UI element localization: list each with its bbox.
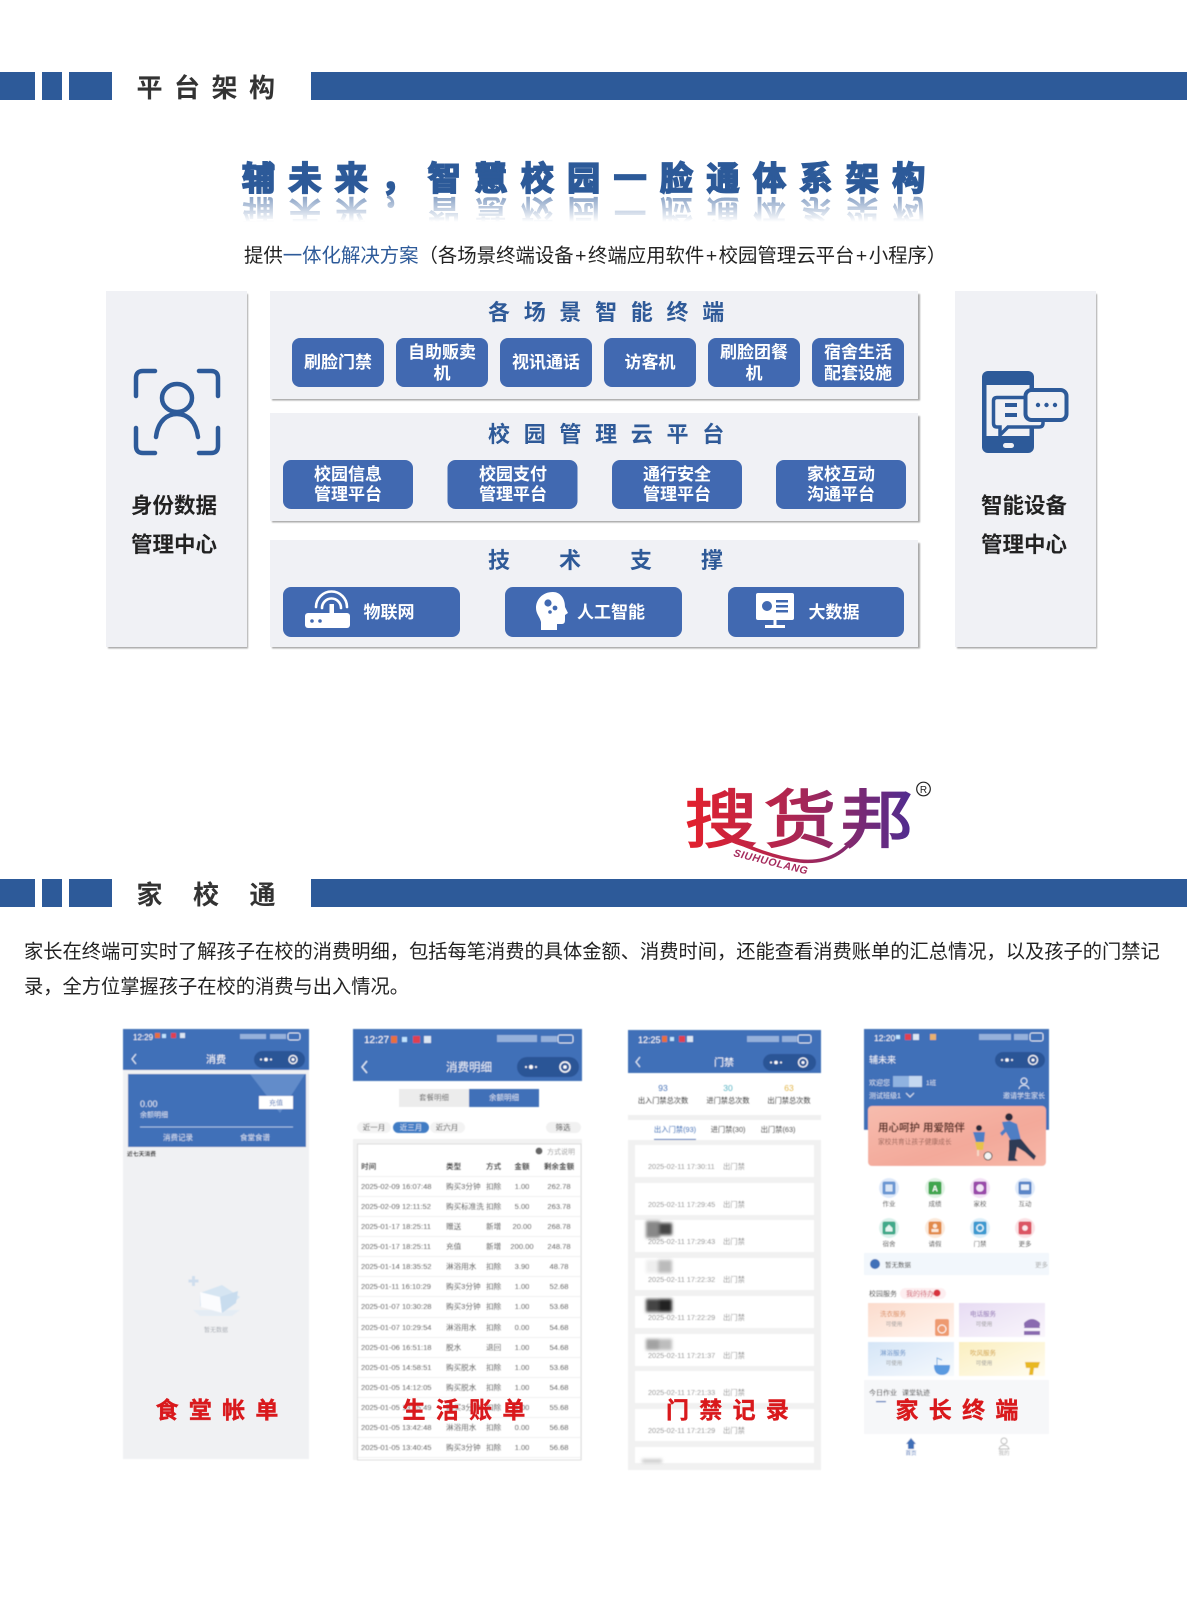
empty-state box illustration [188, 1276, 240, 1316]
phone screenshot: parent terminal: 电话服务 [970, 1309, 996, 1318]
phone screenshot: living bill: 淋浴用水 [446, 1261, 477, 1271]
platform buttons [283, 460, 906, 509]
phone screenshot: living bill: 金额 [514, 1161, 530, 1171]
phone screenshot: access records: 进门禁总次数 [706, 1096, 750, 1105]
phone screenshot: living bill: 淋浴用水 [446, 1322, 477, 1332]
phone screenshot: living bill: 购买脱水 [446, 1362, 477, 1372]
phone screenshot: living bill: 扣除 [486, 1402, 502, 1412]
phone screenshot: parent terminal: 校园服务 [869, 1289, 897, 1298]
tech button: big data [728, 587, 904, 637]
phone screenshot: parent terminal: 课堂轨迹 [902, 1388, 930, 1397]
phone screenshot: living bill: 0.00 [515, 1423, 529, 1432]
feature icons: 作业 [882, 1199, 896, 1208]
phone screenshot: access records: 93 [658, 1083, 668, 1093]
subtitle: 提供一体化解决方案（各场景终端设备+终端应用软件+校园管理云平台+小程序） [244, 245, 946, 267]
section header: 平台架构: 平台架构 [136, 73, 287, 103]
phone screenshot: living bill: 2025-02-09 16:07:48 [361, 1182, 432, 1191]
phone screenshot: living bill: 53.68 [549, 1363, 569, 1372]
phone screenshot: living bill: 余额明细 [489, 1092, 519, 1102]
phone screenshot: parent terminal: 吹风服务 [970, 1348, 996, 1357]
phone screenshot: living bill: 1.00 [515, 1302, 529, 1311]
banner: 用心呵护 用爱陪伴 [878, 1121, 965, 1134]
phone screenshot: parent terminal: 可使用 [886, 1359, 902, 1367]
phone screenshot: access records: 2025-02-11 17:21:37 [648, 1351, 715, 1360]
feature icons: A [932, 1184, 938, 1194]
panel: smart terminals: 各场景智能终端 [488, 300, 738, 325]
phone screenshot: living bill: 20.00 [512, 1222, 532, 1231]
phone screenshot: living bill: 扣除 [486, 1281, 502, 1291]
phone screenshot: access records: 2025-02-11 17:21:29 [648, 1426, 715, 1435]
phone screenshot: living bill: 248.78 [547, 1242, 571, 1251]
phone screenshot: living bill: 263.78 [547, 1202, 571, 1211]
phone screenshot: parent terminal: 可使用 [976, 1359, 992, 1367]
phone screenshot: living bill: 近三月 [400, 1122, 422, 1132]
feature icons: 门禁 [974, 1239, 987, 1248]
panel: smart device management centre: 管理中心 [981, 533, 1067, 557]
feature icons: 宿舍 [882, 1239, 896, 1248]
phone screenshot: canteen bill: 消费记录 [163, 1132, 193, 1142]
phone screenshot: living bill: 200.00 [510, 1242, 534, 1251]
phone screenshot: living bill: 新增 [486, 1221, 501, 1231]
phone screenshot: access records: 出入门禁(93) [654, 1125, 696, 1134]
terminal buttons: 配套设施 [824, 363, 892, 383]
title with reflection: 辅未来，智慧校园一脸通体系架构 [242, 160, 939, 197]
phone screenshot: living bill: 2025-01-14 18:35:52 [361, 1262, 432, 1271]
feature icons [879, 1178, 1035, 1248]
phone screenshot: living bill: 购买3分钟 [446, 1281, 481, 1291]
phone screenshot: living bill: 2025-01-07 10:30:28 [361, 1302, 432, 1311]
section header: 家校通 [0, 879, 1187, 910]
section header: 家校通: 家校通 [136, 880, 306, 910]
phone screenshot: living bill: 扣除 [486, 1261, 502, 1271]
phone screenshot: canteen bill: 食堂食谱 [240, 1132, 270, 1142]
phone screenshot: access records: 12:25 [638, 1035, 661, 1045]
phone screenshot: access records: 出门禁 [723, 1426, 745, 1435]
phone screenshot: access records: 出门禁 [723, 1237, 745, 1246]
paragraph: 录，全方位掌握孩子在校的消费与出入情况。 [24, 976, 409, 998]
panel: identity data management centre [106, 291, 248, 648]
phone screenshot: canteen bill: 消费 [206, 1053, 226, 1066]
phone screenshot: access records: 出门禁 [723, 1200, 745, 1209]
phone screenshot: access records: 出门禁 [723, 1351, 745, 1360]
phone screenshot: living bill: 2025-01-05 13:45:49 [361, 1403, 432, 1412]
phone screenshot: living bill: 2025-01-17 18:25:11 [361, 1222, 431, 1231]
phone screenshot: access records: 门禁 [714, 1056, 734, 1069]
phone screenshot: living bill: 2025-01-17 18:25:11 [361, 1242, 431, 1251]
phone screenshot: canteen bill [123, 1029, 309, 1459]
label: parent terminal: 家长终端 [896, 1397, 1029, 1423]
phone screenshot: living bill: 类型 [446, 1161, 462, 1171]
phone screenshot: parent terminal: 暂无数据 [885, 1260, 912, 1269]
logo: 搜货邦: SIUHUOLANG [732, 847, 809, 877]
phone screenshot: living bill: 5.00 [515, 1202, 529, 1211]
paragraph [24, 941, 1160, 998]
phone screenshot: living bill: 近一月 [363, 1122, 385, 1132]
phone screenshot: parent terminal: 欢迎您 [869, 1078, 890, 1087]
panel: technical support: 技术支撑 [488, 548, 772, 573]
phone screenshot: living bill: 扣除 [486, 1422, 502, 1432]
phone screenshot: access records: 出门禁总次数 [767, 1096, 811, 1105]
panel: identity data management centre: 身份数据 [131, 494, 217, 518]
phone screenshot: living bill: 2025-01-05 13:42:48 [361, 1423, 432, 1432]
tech button: big data: 大数据 [808, 603, 860, 622]
phone screenshot: living bill: 方式 [486, 1161, 502, 1171]
phone screenshot: living bill: 2025-01-05 14:12:05 [361, 1383, 432, 1392]
phone screenshot: living bill: 购买3分钟 [446, 1181, 481, 1191]
phone screenshot: living bill: 3.90 [515, 1262, 529, 1271]
blurred avatars [642, 1221, 672, 1463]
phone screenshot: living bill: 54.68 [549, 1383, 569, 1392]
phone screenshot: canteen bill: 12:29 [133, 1033, 154, 1042]
platform buttons: 管理平台 [314, 484, 382, 504]
label: access records: 门禁记录 [666, 1397, 799, 1423]
phone screenshot: parent terminal: 更多 [1035, 1260, 1048, 1269]
phone screenshot: living bill: 2025-01-11 16:10:29 [361, 1282, 431, 1291]
label: living bill: 生活账单 [402, 1397, 536, 1423]
platform buttons: 校园支付 [479, 464, 547, 484]
phone screenshot: parent terminal: 可使用 [976, 1320, 992, 1328]
panel: smart device management centre: 智能设备 [981, 494, 1067, 518]
phone screenshot: living bill: 268.78 [547, 1222, 571, 1231]
panel: technical support [270, 540, 920, 648]
phone screenshot: parent terminal: 洗衣服务 [880, 1309, 906, 1318]
phone screenshot: living bill: 262.78 [547, 1182, 571, 1191]
icon: phone with chat bubbles [982, 371, 1066, 453]
logo: 搜货邦 [685, 782, 930, 877]
phone screenshot: parent terminal: 首页 [905, 1449, 917, 1457]
platform buttons: 管理平台 [643, 484, 711, 504]
phone screenshot: living bill: 购买标准洗 [446, 1201, 484, 1211]
phone screenshot: living bill: 扣除 [486, 1362, 502, 1372]
phone screenshot: access records: 出入门禁总次数 [638, 1096, 688, 1105]
phone screenshot: access records: 出门禁 [723, 1313, 745, 1322]
phone screenshot: parent terminal: 我的 [998, 1449, 1010, 1457]
phone screenshot: living bill: 筛选 [556, 1122, 571, 1132]
phone screenshot: living bill: 2025-02-09 12:11:52 [361, 1202, 431, 1211]
phone screenshot: access records [628, 1030, 821, 1470]
terminal buttons: 机 [746, 364, 762, 383]
phone screenshot: living bill: 56.68 [549, 1443, 569, 1452]
panel: campus cloud platform: 校园管理云平台 [488, 422, 738, 447]
phone screenshot: living bill: 赠送 [446, 1221, 462, 1231]
panel: smart terminals [270, 291, 920, 400]
phone screenshot: living bill: 购买3分钟 [446, 1402, 481, 1412]
phone screenshot: parent terminal: 邀请学生家长 [1003, 1091, 1045, 1100]
terminal buttons: 视讯通话 [512, 353, 580, 372]
phone screenshot: living bill: 新增 [486, 1241, 501, 1251]
icon: face recognition [136, 371, 218, 453]
title with reflection [242, 160, 939, 230]
phone screenshot: living bill: 购买3分钟 [446, 1442, 481, 1452]
panel: identity data management centre: 管理中心 [131, 533, 217, 557]
phone screenshot: living bill: 扣除 [486, 1181, 502, 1191]
logo: 搜货邦: R [920, 785, 927, 796]
phone screenshot: living bill: 退回 [486, 1343, 501, 1352]
phone screenshot: parent terminal: 可使用 [886, 1320, 902, 1328]
phone screenshot: living bill: 2025-01-05 13:40:45 [361, 1443, 432, 1452]
phone screenshot: canteen bill: 0.00 [140, 1099, 158, 1109]
phone screenshot: living bill: 剩余金额 [544, 1161, 575, 1171]
phone screenshot: living bill: 2025-01-07 10:29:54 [361, 1323, 432, 1332]
feature icons: 成绩 [928, 1199, 942, 1208]
phone screenshot: parent terminal: 我的待办 [906, 1289, 934, 1298]
phone screenshot: living bill: 购买3分钟 [446, 1301, 481, 1311]
phone screenshot: parent terminal: 今日作业 [869, 1388, 897, 1397]
terminal buttons: 访客机 [624, 352, 676, 372]
phone screenshot: living bill: 54.68 [549, 1343, 569, 1352]
phone screenshot: living bill: 55.68 [549, 1403, 569, 1412]
platform buttons: 管理平台 [479, 484, 547, 504]
phone screenshot: access records: 2025-02-11 17:22:29 [648, 1313, 715, 1322]
banner [868, 1106, 1046, 1166]
platform buttons: 校园信息 [314, 464, 382, 484]
logo: 搜货邦: 搜货邦 [685, 786, 913, 856]
section header: 平台架构 [0, 72, 1187, 103]
tech button: IoT: 物联网 [364, 603, 414, 622]
phone screenshot: living bill: 扣除 [486, 1301, 502, 1311]
phone screenshot: living bill: 扣除 [486, 1322, 502, 1332]
terminal buttons: 宿舍生活 [824, 342, 892, 362]
terminal buttons: 刷脸团餐 [720, 342, 788, 362]
phone screenshot: living bill: 0.00 [515, 1323, 529, 1332]
phone screenshot: living bill: 脱水 [446, 1342, 462, 1352]
phone screenshot: living bill: 扣除 [486, 1201, 502, 1211]
phone screenshot: living bill: 54.68 [549, 1323, 569, 1332]
phone screenshot: living bill: 充值 [446, 1241, 462, 1251]
phone screenshot: living bill: 56.68 [549, 1423, 569, 1432]
phone screenshot: living bill: 1.00 [515, 1443, 529, 1452]
feature icons: 互动 [1018, 1200, 1032, 1208]
terminal buttons: 自助贩卖 [408, 342, 476, 362]
feature icons: 更多 [1018, 1239, 1032, 1248]
phone screenshot: living bill: 1.00 [515, 1403, 529, 1412]
phone screenshot: living bill: 1.00 [515, 1383, 529, 1392]
phone screenshot: living bill: 消费明细 [446, 1060, 492, 1074]
phone screenshot: living bill: 53.68 [549, 1302, 569, 1311]
phone screenshot: canteen bill: 暂无数据 [204, 1326, 228, 1334]
phone screenshot: access records: 2025-02-11 17:21:33 [648, 1388, 715, 1397]
phone screenshot: living bill: 淋浴用水 [446, 1422, 477, 1432]
feature icons: 家校 [974, 1199, 987, 1208]
phone screenshot: access records: 2025-02-11 17:30:11 [648, 1162, 715, 1171]
phone screenshot: parent terminal: 12:20 [874, 1033, 896, 1043]
terminal buttons: 机 [434, 364, 450, 383]
terminal buttons [292, 338, 904, 387]
phone screenshot: access records: 2025-02-11 17:29:43 [648, 1237, 715, 1246]
phone screenshot: access records: 出门禁 [723, 1162, 745, 1171]
phone screenshot: living bill: 套餐明细 [419, 1092, 449, 1102]
terminal buttons: 刷脸门禁 [304, 352, 372, 372]
platform buttons: 沟通平台 [807, 484, 875, 504]
phone screenshot: living bill: 扣除 [486, 1442, 502, 1452]
phone screenshot: living bill: 1.00 [515, 1182, 529, 1191]
phone screenshot: living bill: 购买脱水 [446, 1382, 477, 1392]
phone screenshot: parent terminal: 测试班级1 [869, 1091, 901, 1100]
label: canteen bill: 食堂帐单 [156, 1397, 289, 1423]
title with reflection: 辅未来，智慧校园一脸通体系架构 [242, 193, 939, 230]
tech button: AI: 人工智能 [577, 602, 645, 622]
phone screenshot: living bill: 近六月 [436, 1122, 458, 1132]
phone screenshot: living bill: 48.78 [549, 1262, 569, 1271]
phone screenshot: living bill: 1.00 [515, 1282, 529, 1291]
phone screenshot: living bill: 1.00 [515, 1343, 529, 1352]
phone screenshot: access records: 出门禁 [723, 1275, 745, 1284]
phone screenshot: canteen bill: 充值 [269, 1098, 283, 1107]
platform buttons: 通行安全 [643, 464, 711, 484]
panel: campus cloud platform [270, 413, 920, 522]
phone screenshot: living bill: 2025-01-05 14:58:51 [361, 1363, 432, 1372]
tech button: AI [505, 587, 682, 637]
banner: 家校共育让孩子健康成长 [878, 1137, 952, 1146]
phone screenshot: living bill: 扣除 [486, 1382, 502, 1392]
phone screenshot: living bill: 2025-01-06 16:51:18 [361, 1343, 432, 1352]
phone screenshot: canteen bill: 余额明细 [140, 1110, 168, 1119]
phone screenshot: access records: 2025-02-11 17:22:32 [648, 1275, 715, 1284]
phone screenshot: access records: 30 [723, 1083, 733, 1093]
phone screenshot: parent terminal: 淋浴服务 [880, 1348, 906, 1357]
phone screenshot: parent terminal: 辅未来 [869, 1054, 896, 1065]
feature icons: 请假 [928, 1239, 942, 1248]
phone screenshot: living bill: 1.00 [515, 1363, 529, 1372]
phone screenshot: living bill: 方式说明 [547, 1147, 575, 1156]
phone screenshot: access records: 2025-02-11 17:29:45 [648, 1200, 715, 1209]
phone screenshot: living bill: 52.68 [549, 1282, 569, 1291]
phone screenshot: canteen bill: 近七天消费 [127, 1150, 156, 1158]
phone screenshot: access records: 63 [784, 1083, 794, 1093]
platform buttons: 家校互动 [807, 464, 875, 484]
phone screenshot: access records: 进门禁(30) [711, 1125, 745, 1134]
phone screenshot: living bill [353, 1029, 582, 1460]
phone screenshot: parent terminal [864, 1029, 1049, 1457]
phone screenshot: access records: 出门禁 [723, 1388, 745, 1397]
phone screenshot: living bill: 时间 [361, 1161, 377, 1171]
phone screenshot: parent terminal: 1班 [926, 1078, 937, 1087]
paragraph: 家长在终端可实时了解孩子在校的消费明细，包括每笔消费的具体金额、消费时间，还能查看消费账单的汇总情况，以及孩子的门禁记 [24, 941, 1160, 963]
panel: smart device management centre [955, 291, 1097, 648]
tech button: IoT [283, 587, 460, 637]
phone screenshot: living bill: 12:27 [364, 1035, 389, 1046]
phone screenshot: access records: 出门禁(63) [761, 1125, 795, 1134]
